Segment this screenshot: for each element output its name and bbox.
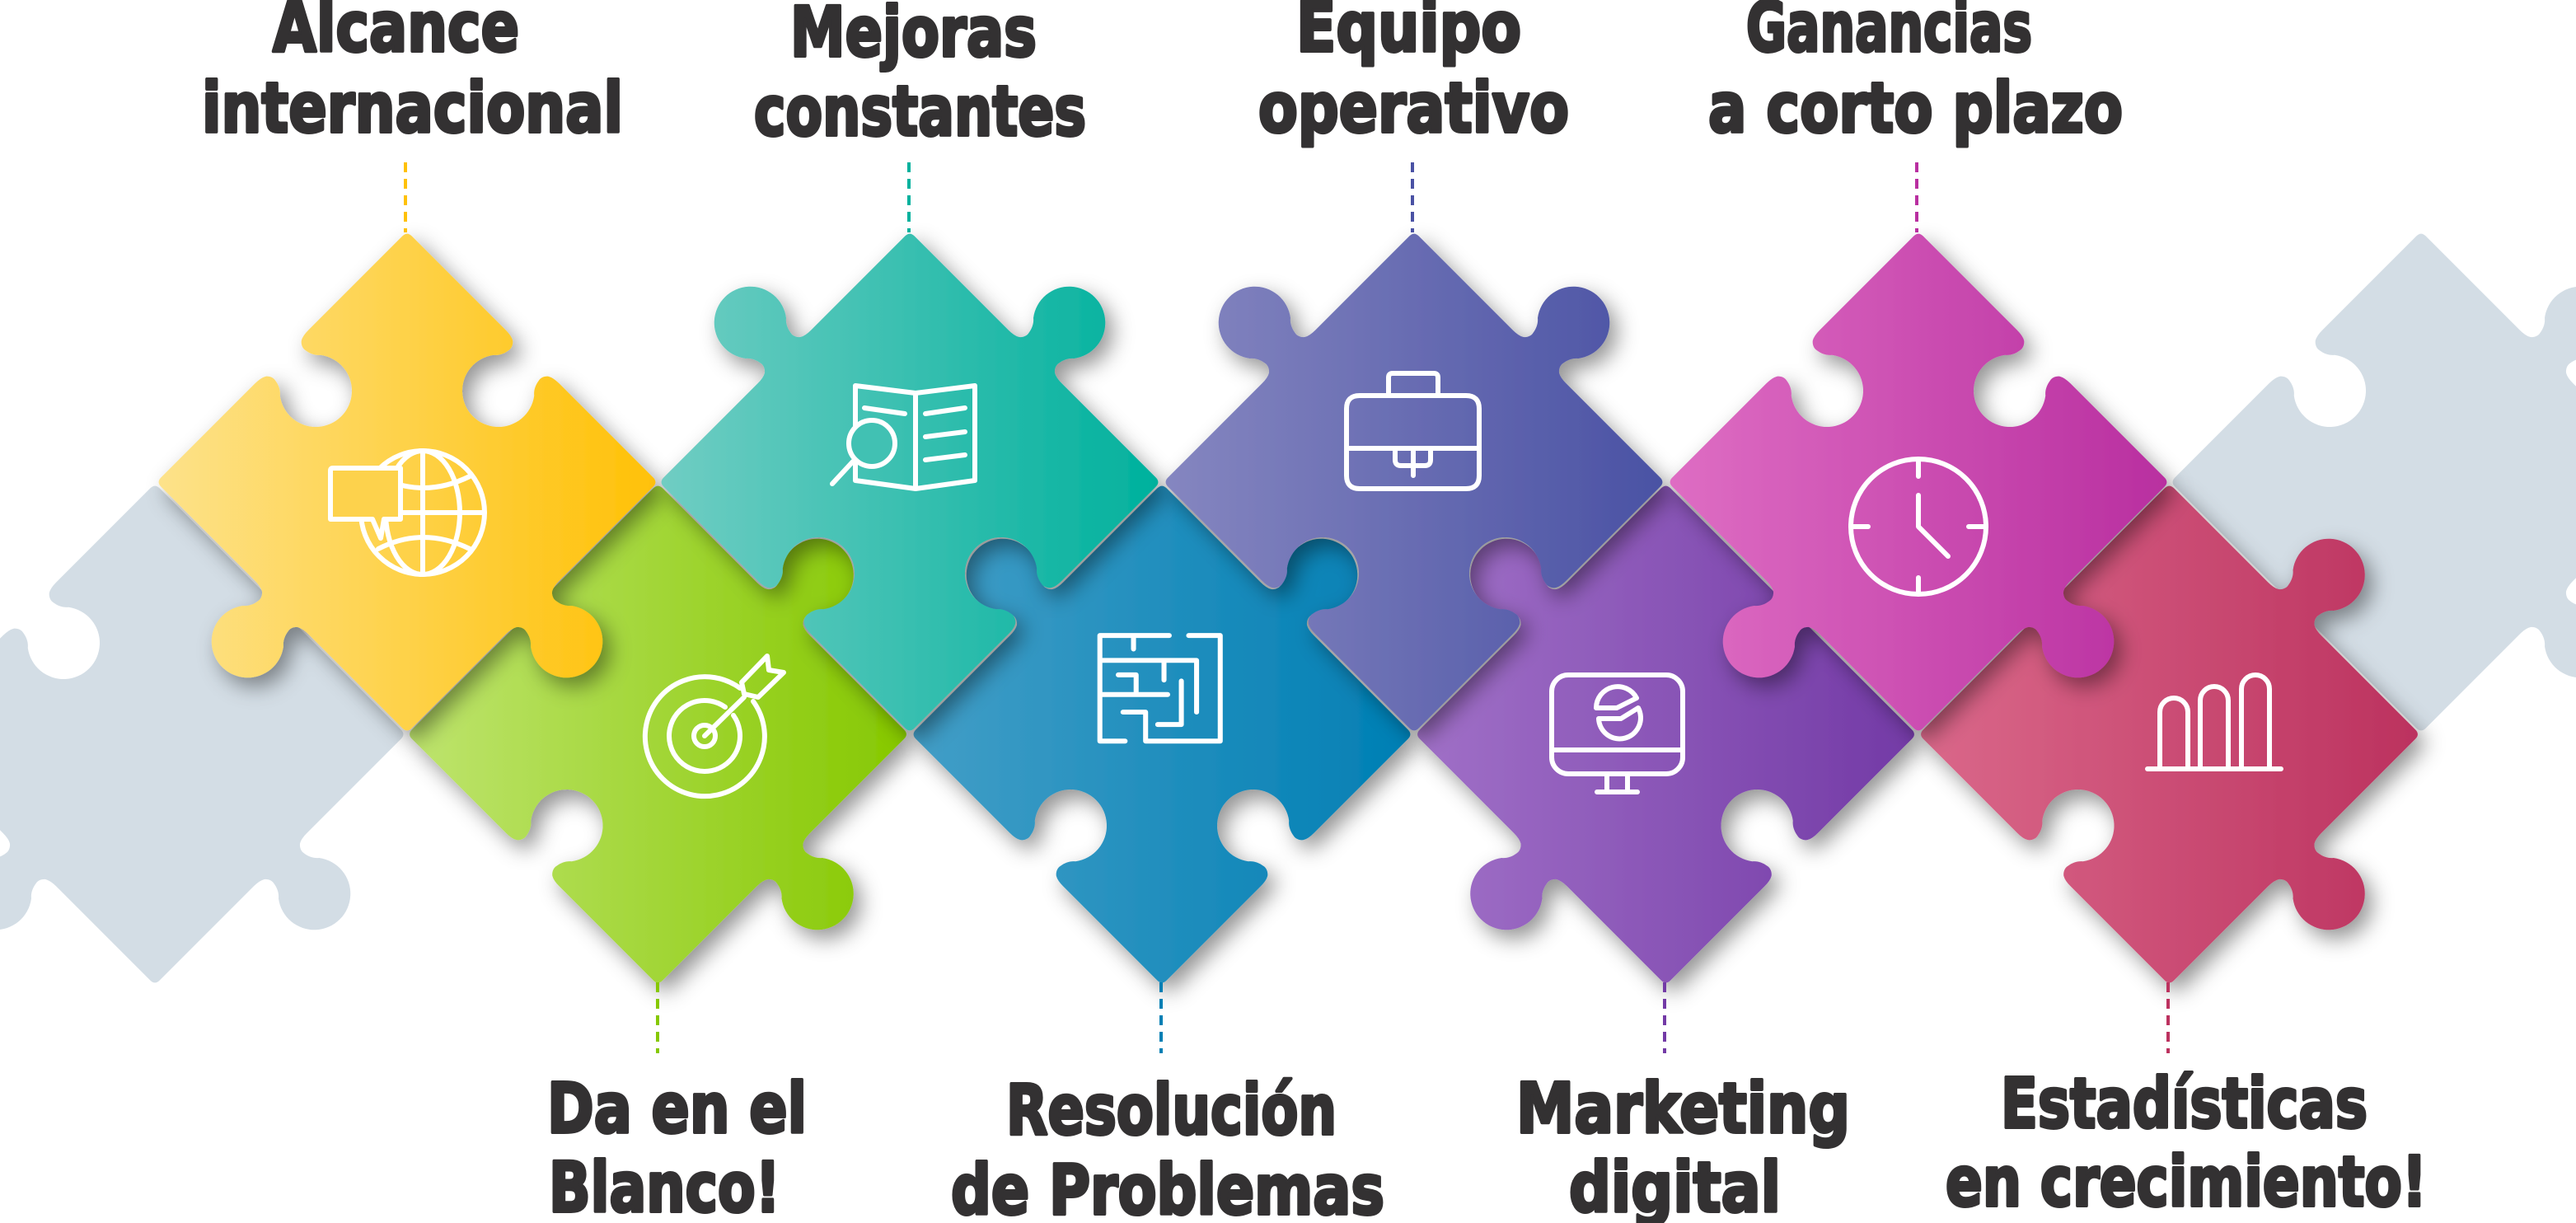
puzzle piece: yellow — [96, 232, 718, 852]
icon: globe with speech bubble — [330, 451, 485, 574]
dashed connector: purple — [1663, 982, 1666, 1053]
icon: clock — [1851, 459, 1986, 594]
puzzle piece: red — [1918, 424, 2539, 1045]
label: Estadísticas en crecimiento!: Estadísticas — [2001, 1063, 2368, 1144]
label: Ganancias a corto plazo: a corto plazo — [1708, 68, 2123, 148]
label: Mejoras constantes: constantes — [754, 71, 1086, 152]
label: Equipo operativo: operativo — [1258, 68, 1569, 148]
label: Alcance internacional: internacional — [202, 68, 623, 148]
icon: briefcase — [1347, 373, 1479, 489]
dashed connector: green — [656, 982, 659, 1053]
icon: monitor with pie chart — [1552, 675, 1683, 792]
dashed connector: yellow — [404, 162, 407, 232]
label: Alcance internacional — [202, 0, 623, 148]
label: Resolución de Problemas — [951, 1070, 1384, 1223]
label: Mejoras constantes — [754, 0, 1086, 152]
label: Marketing digital: Marketing — [1516, 1068, 1850, 1149]
label: Ganancias a corto plazo — [1708, 0, 2123, 148]
puzzle piece: purple — [1296, 424, 1917, 1045]
puzzle piece: blue — [851, 364, 1473, 985]
puzzle piece: green — [407, 424, 1028, 1045]
dashed connector: magenta — [1915, 162, 1918, 232]
puzzle piece: grey right — [2171, 171, 2576, 793]
puzzle piece: indigo — [1103, 112, 1725, 733]
icon: open book with magnifier — [832, 386, 975, 489]
label: Estadísticas en crecimiento!: en crecimiento! — [1946, 1141, 2427, 1222]
dashed connector: blue — [1159, 982, 1163, 1053]
puzzle piece: grey left — [0, 484, 466, 1104]
puzzle piece: magenta — [1608, 232, 2229, 852]
icon: maze — [1100, 635, 1220, 741]
label: Marketing digital — [1516, 1068, 1850, 1223]
label: Resolución de Problemas: Resolución — [1006, 1070, 1337, 1150]
dashed connector: teal — [907, 162, 911, 232]
label: Equipo operativo — [1258, 0, 1569, 148]
label: Da en el Blanco! — [547, 1068, 807, 1223]
icon: target with arrow — [645, 656, 784, 796]
icon: bar chart — [2147, 675, 2281, 769]
label: Da en el Blanco!: Da en el — [547, 1068, 807, 1149]
puzzle piece: teal — [599, 112, 1220, 733]
dashed connector: red — [2166, 982, 2170, 1053]
dashed connector: indigo — [1411, 162, 1414, 232]
label: Estadísticas en crecimiento! — [1946, 1063, 2427, 1222]
